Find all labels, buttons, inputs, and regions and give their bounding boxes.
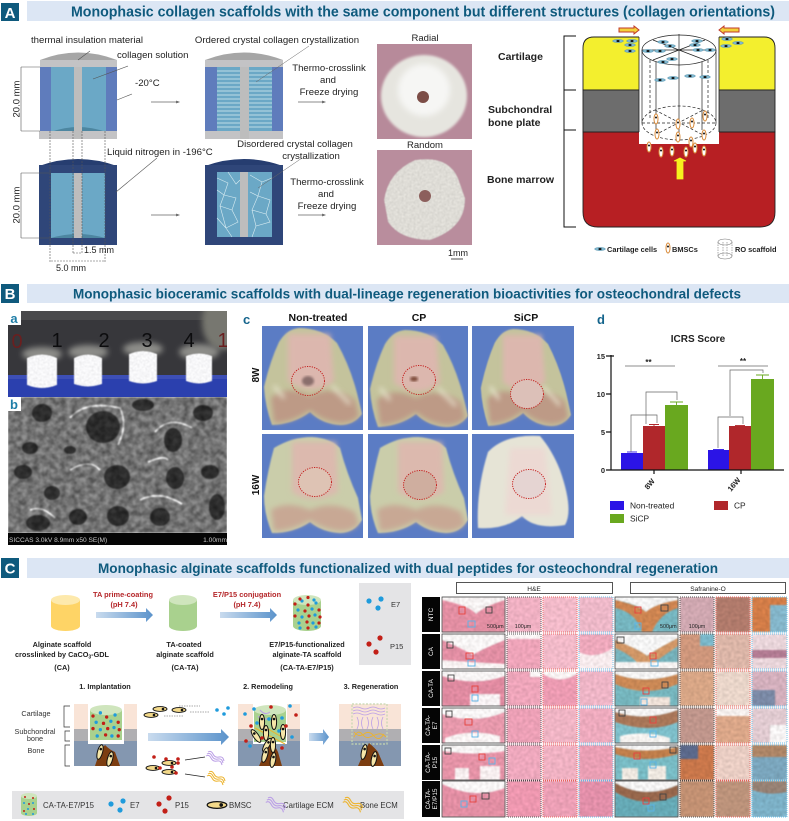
dimension and setup labels: Liquid nitrogen in -196°C xyxy=(107,147,213,158)
stage 3: regeneration xyxy=(339,704,401,767)
significance stars: ** xyxy=(645,358,652,367)
bars xyxy=(621,379,774,470)
scaffold captions: (CA) xyxy=(54,663,70,672)
column headings for knee photos xyxy=(289,312,538,324)
photo a: scaffolds on ruler: 1 xyxy=(217,330,229,352)
tissue labels: Bone xyxy=(27,746,45,755)
row labels: P15 xyxy=(432,756,439,768)
tissue layers xyxy=(583,34,775,227)
BMSCs xyxy=(647,111,707,157)
process labels: Ordered crystal collagen crystallization xyxy=(195,35,359,46)
photo: SiCP 8W xyxy=(472,326,574,430)
scale bars: 500μm xyxy=(660,624,677,630)
photo: radial scaffold: Radial xyxy=(412,33,438,44)
process labels: Thermo-crosslink xyxy=(290,177,364,188)
error bars xyxy=(627,375,769,452)
disordered crystal cylinder xyxy=(205,159,283,245)
scaffold captions: TA-coated xyxy=(166,640,202,649)
row labels: CA-TA- xyxy=(425,789,432,809)
photo a: scaffolds on ruler xyxy=(8,311,227,397)
axis labels: 15 xyxy=(597,352,605,361)
yellow CA scaffold xyxy=(51,595,80,631)
progression arrow xyxy=(148,729,229,745)
process step labels xyxy=(93,590,282,609)
significance stars xyxy=(645,357,747,367)
row labels: CA-TA- xyxy=(425,752,432,773)
migrating cells and peptides xyxy=(144,706,230,785)
photo b: SEM micrograph: 1.00mm xyxy=(203,537,227,544)
green CA-TA scaffold xyxy=(169,595,197,631)
axes xyxy=(606,355,784,474)
axis labels: 10 xyxy=(597,390,605,399)
panel B heading: Monophasic bioceramic scaffolds with dual-lineage regeneration bioactivities for osteochondral defects xyxy=(73,286,741,302)
stage arrow xyxy=(309,729,329,745)
panel C xyxy=(1,558,789,819)
axis labels: 0 xyxy=(601,466,605,475)
chart legend: Non-treated xyxy=(630,500,675,510)
axis labels xyxy=(597,352,743,493)
row labels for knee photos: 16W xyxy=(251,474,262,495)
photo: random scaffold: Random xyxy=(407,140,443,151)
Safranine-O tiles xyxy=(615,597,787,817)
row labels: CA-TA xyxy=(428,678,435,698)
dimension and setup labels: 20.0 mm xyxy=(12,80,22,117)
process labels: Thermo-crosslink xyxy=(292,63,366,74)
panel A badge: A xyxy=(5,5,16,22)
process labels xyxy=(195,35,366,212)
red arrows xyxy=(619,26,739,34)
tissue labels xyxy=(15,709,56,755)
panel B badge xyxy=(1,284,19,303)
peptide key box: E7 xyxy=(391,600,400,609)
tissue labels: Cartilage xyxy=(21,709,51,718)
axis labels: 16W xyxy=(726,475,743,493)
photo: radial scaffold xyxy=(377,33,472,139)
brackets xyxy=(564,36,576,227)
sublabel a xyxy=(8,311,21,326)
dimension and setup labels xyxy=(12,35,213,273)
panel C heading xyxy=(27,558,789,578)
tissue labels: Bone marrow xyxy=(487,174,555,186)
significance brackets xyxy=(625,366,768,452)
scaffold captions: alginate scaffold xyxy=(156,650,214,659)
cartilage cells xyxy=(612,37,744,82)
row labels xyxy=(422,597,440,817)
chart legend xyxy=(610,500,746,524)
schematic legend: BMSCs xyxy=(672,245,698,254)
scaffold captions xyxy=(15,640,345,672)
panel B xyxy=(1,284,789,545)
peptide key box xyxy=(359,583,411,665)
chart legend: SiCP xyxy=(630,514,649,524)
osteochondral defect schematic xyxy=(487,26,777,259)
arrows between stages xyxy=(151,101,325,216)
sublabel a: a xyxy=(10,311,18,326)
panel C heading: Monophasic alginate scaffolds functionalized with dual peptides for osteochondral regeneration xyxy=(98,560,718,576)
tissue labels: bone xyxy=(27,734,43,743)
photo b: SEM micrograph: SICCAS 3.0kV 8.9mm x50 SE(M) xyxy=(9,537,107,544)
panel C badge: C xyxy=(5,560,16,578)
process step labels: E7/P15 conjugation xyxy=(213,590,282,599)
column headings for knee photos: SiCP xyxy=(514,312,538,324)
photo a: scaffolds on ruler: 0 xyxy=(11,331,23,353)
tissue labels: Subchondral xyxy=(15,727,56,736)
photo: random scaffold xyxy=(377,140,472,245)
region-of-interest squares xyxy=(445,605,676,811)
knee photo grid xyxy=(262,326,574,538)
scaffold captions: (CA-TA-E7/P15) xyxy=(280,663,334,672)
row labels: NTC xyxy=(428,608,435,621)
panel A badge xyxy=(1,3,19,22)
schematic legend: RO scaffold xyxy=(735,245,777,254)
tile frames xyxy=(442,597,787,817)
stage headings: 3. Regeneration xyxy=(344,682,398,691)
process labels: Freeze drying xyxy=(298,201,356,212)
process labels: and xyxy=(320,75,336,86)
bottom legend bar: BMSC xyxy=(229,801,252,810)
leader lines xyxy=(256,46,309,188)
bottom legend bar: CA-TA-E7/P15 xyxy=(43,801,95,810)
process labels: Disordered crystal collagen xyxy=(237,139,353,150)
photo a: scaffolds on ruler: 2 xyxy=(98,330,110,352)
scaffold captions: E7/P15-functionalized xyxy=(269,640,345,649)
tissue labels: Cartilage xyxy=(498,51,543,63)
stage headings: 1. Implantation xyxy=(79,682,131,691)
peptide scaffold xyxy=(293,595,322,631)
schematic legend: Cartilage cells xyxy=(607,245,657,254)
row labels: E7 xyxy=(432,721,439,729)
scaffold captions: Alginate scaffold xyxy=(33,640,91,649)
process step labels: (pH 7.4) xyxy=(110,600,138,609)
bottom legend bar: P15 xyxy=(175,801,190,810)
scaffold captions: -GDL xyxy=(91,650,110,659)
stage headings: 2. Remodeling xyxy=(243,682,293,691)
photo b: SEM micrograph xyxy=(8,397,227,545)
panel A heading: Monophasic collagen scaffolds with the same component but different structures (collagen orientations) xyxy=(71,4,775,20)
H&E header: H&E xyxy=(527,586,541,593)
sublabel b: b xyxy=(10,397,18,412)
axis labels: 8W xyxy=(643,476,657,491)
stage headings xyxy=(79,682,398,691)
row labels: E7/P15 xyxy=(432,788,439,809)
dimension and setup labels: 1.5 mm xyxy=(84,245,114,255)
mould: -20°C setup xyxy=(39,52,117,139)
scaffold captions: crosslinked by CaCO xyxy=(15,650,88,659)
yellow upward arrow xyxy=(674,158,686,179)
bar chart: ICRS Score xyxy=(597,334,784,524)
panel B badge: B xyxy=(5,286,16,303)
bottom legend bar xyxy=(12,791,404,819)
row labels for knee photos: 8W xyxy=(251,367,262,382)
H&E tiles xyxy=(442,597,613,817)
column headings for knee photos: CP xyxy=(412,312,426,324)
peptide key box: P15 xyxy=(390,642,403,651)
bottom legend bar: E7 xyxy=(130,801,140,810)
panel A xyxy=(1,1,789,273)
sublabel d: d xyxy=(597,312,605,327)
dimension and setup labels: -20°C xyxy=(135,78,160,89)
scaffold captions: 3 xyxy=(88,654,91,660)
scale bars: 100μm xyxy=(515,624,532,630)
row labels for knee photos xyxy=(251,367,262,495)
panel C badge xyxy=(1,558,19,578)
tissue labels xyxy=(487,51,555,186)
process labels: crystallization xyxy=(282,151,340,162)
process labels: Freeze drying xyxy=(300,87,358,98)
tissue brackets xyxy=(64,706,70,766)
dimension lines xyxy=(21,51,157,262)
chart title: ICRS Score xyxy=(671,334,726,345)
significance stars: ** xyxy=(740,357,747,366)
tissue labels: bone plate xyxy=(488,117,541,129)
schematic legend xyxy=(594,239,777,259)
scale bars: 100μm xyxy=(689,624,706,630)
dimension and setup labels: 5.0 mm xyxy=(56,263,86,273)
mould: liquid nitrogen setup xyxy=(39,159,117,245)
photo: non-treated 16W xyxy=(262,434,363,538)
stage 1: implantation xyxy=(74,704,137,767)
scale bar 1mm: 1mm xyxy=(448,248,468,258)
dimension and setup labels: 20.0 mm xyxy=(12,186,22,223)
bottom legend bar: Bone ECM xyxy=(360,801,398,810)
dimension and setup labels: collagen solution xyxy=(117,50,188,61)
process arrows xyxy=(96,608,277,622)
process step labels: TA prime-coating xyxy=(93,590,153,599)
photo: SiCP 16W xyxy=(472,434,574,538)
scale bars: 500μm xyxy=(487,624,504,630)
photo: CP 16W xyxy=(368,434,468,538)
Safranine-O header xyxy=(630,582,786,594)
scale bars xyxy=(487,624,706,630)
dimension and setup labels: thermal insulation material xyxy=(31,35,143,46)
chart legend: CP xyxy=(734,500,746,510)
process step labels: (pH 7.4) xyxy=(233,600,261,609)
stage 2: remodeling xyxy=(238,704,300,768)
photo: CP 8W xyxy=(368,326,468,430)
scaffold captions: (CA-TA) xyxy=(171,663,199,672)
photo: non-treated 8W xyxy=(262,326,363,430)
scaffold captions: alginate-TA scaffold xyxy=(273,650,341,659)
axis labels: 5 xyxy=(601,428,605,437)
row labels: CA xyxy=(428,646,435,656)
RO scaffold cylinder xyxy=(642,34,716,140)
H&E header xyxy=(456,582,612,594)
row labels: CA-TA- xyxy=(425,715,432,736)
Safranine-O header: Safranine-O xyxy=(690,586,726,593)
photo a: scaffolds on ruler: 3 xyxy=(141,330,153,352)
histology grid xyxy=(422,582,787,817)
photo a: scaffolds on ruler: 1 xyxy=(51,330,63,352)
sublabel b xyxy=(8,397,21,412)
sublabel c: c xyxy=(243,312,250,327)
column headings for knee photos: Non-treated xyxy=(289,312,347,324)
tissue labels: Subchondral xyxy=(488,104,552,116)
process labels: and xyxy=(318,189,334,200)
photo a: scaffolds on ruler: 4 xyxy=(183,330,195,352)
ordered crystal cylinder xyxy=(205,52,283,139)
bottom legend bar: Cartilage ECM xyxy=(283,801,334,810)
